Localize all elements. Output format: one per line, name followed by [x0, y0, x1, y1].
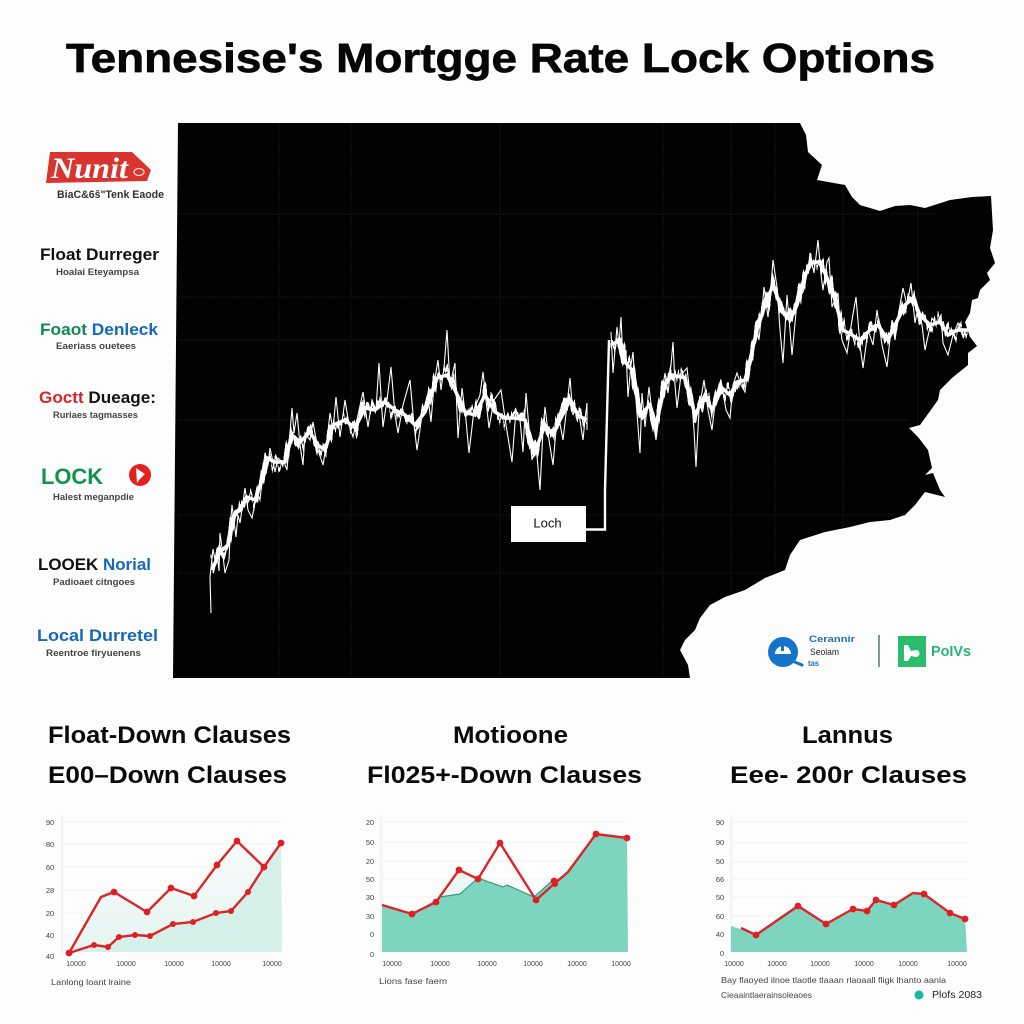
area chart 2: Lions fase faem: [379, 976, 447, 986]
heading: chart 2: Motioone: [453, 722, 568, 749]
area chart 3: 50: [716, 857, 724, 866]
line chart 1: 80: [46, 840, 54, 849]
panel: chart 1: [46, 722, 291, 987]
legend: Local Durretel: Reentroe firyuenens: [46, 648, 141, 659]
line chart 1: 10000: [211, 961, 231, 968]
legend: Foaot Denleck: Eaeriass ouetees: [56, 341, 136, 352]
line chart 1: [46, 815, 284, 987]
area chart 2: 20: [366, 818, 374, 827]
legend: Goctt Dueage: [39, 388, 156, 421]
legend: Float Durreger: [40, 245, 159, 278]
legend: Foaot Denleck: [40, 320, 159, 352]
legend: Goctt Dueage: Ruriaes tagmasses: [53, 410, 138, 421]
legend: LOCK: [41, 464, 151, 503]
area chart 3: 60: [716, 912, 724, 921]
area chart 2: 50: [366, 838, 374, 847]
map silhouette: [173, 123, 995, 678]
legend: Goctt Dueage: Goctt Dueage:: [39, 388, 156, 407]
line chart 1: 90: [46, 818, 54, 827]
area chart 3: 10000: [854, 961, 874, 968]
legend: LOCK: LOCK: [41, 464, 103, 489]
line chart 1: 60: [46, 863, 54, 872]
heading: chart 1: E00–Down Clauses: [48, 762, 287, 789]
icon: blue magnifier logo: [768, 637, 802, 667]
area chart 2: 10000: [477, 961, 497, 968]
legend: LOOEK Norial: Padioaet citngoes: [53, 577, 135, 588]
connector from Loch callout to rate line: [586, 340, 609, 530]
heading: chart 1: Float-Down Clauses: [48, 722, 291, 749]
area chart 3: 0: [720, 949, 724, 958]
area chart 2: 0: [370, 930, 374, 939]
legend: Nunit badge: Nunit: [50, 152, 130, 185]
line chart 1: 10000: [116, 961, 136, 968]
area chart 3: [716, 815, 982, 1001]
area chart 3: 50: [716, 893, 724, 902]
legend: LOOEK Norial: [38, 555, 151, 588]
area chart 2: 10000: [523, 961, 543, 968]
legend: Plofs 2083: Plofs 2083: [932, 990, 982, 1001]
area chart 3: 10000: [898, 961, 918, 968]
legend: LOCK: Halest meganpdie: [53, 492, 134, 503]
area chart 2: 30: [366, 912, 374, 921]
legend: Plofs 2083: [914, 990, 982, 1001]
line chart 1: 28: [46, 886, 54, 895]
chart 3 caption: [721, 975, 946, 1000]
legend: Float Durreger: Hoalai Eteyampsa: [56, 267, 140, 278]
area chart 2: 20: [366, 857, 374, 866]
line chart 1: 10000: [66, 961, 86, 968]
heading: chart 3: [730, 722, 967, 789]
area chart 2: 10000: [430, 961, 450, 968]
legend: Nunit badge: BiaC&6ŝ"Tenk Eaode: [57, 189, 164, 201]
area chart 3: 10000: [767, 961, 787, 968]
callout: Loch: [511, 506, 586, 542]
heading: chart 3: Eee- 200r Clauses: [730, 762, 967, 789]
area chart 2: 30: [366, 893, 374, 902]
area chart 2: 50: [366, 875, 374, 884]
logo text: Seolam: [810, 647, 839, 657]
area chart 2: [366, 815, 631, 986]
icon: green square logo: [898, 636, 926, 667]
logos: [768, 634, 971, 668]
legend: Local Durretel: [37, 626, 158, 659]
line chart 1: 10000: [262, 961, 282, 968]
heading: chart 2: [367, 722, 642, 789]
area chart 3: 10000: [947, 961, 967, 968]
area chart 3: 66: [716, 875, 724, 884]
area chart 3: 40: [716, 930, 724, 939]
legend: LOOEK Norial: LOOEK Norial: [38, 555, 151, 574]
chart grid lines: [178, 123, 965, 678]
logo text: [808, 634, 856, 668]
panel: black map with rate chart: [173, 123, 995, 678]
title: Tennesise's Mortgge Rate Lock Options: [66, 35, 935, 81]
legend: Local Durretel: Local Durretel: [37, 626, 158, 645]
logo text: tas: [808, 659, 820, 668]
area chart 3: 10000: [810, 961, 830, 968]
line chart 1: Lanlong loant lraine: [51, 977, 131, 987]
logo text: PoIVs: PoIVs: [931, 643, 971, 660]
logo text: Cerannir: [809, 634, 856, 644]
panel: left legend: [37, 152, 164, 659]
rate line: first segment: [210, 330, 587, 613]
area chart 3: 10000: [724, 961, 744, 968]
heading: chart 3: Lannus: [802, 722, 893, 749]
panel: chart 3: [716, 722, 982, 1001]
legend: Float Durreger: Float Durreger: [40, 245, 159, 264]
heading: chart 2: Fl025+-Down Clauses: [367, 762, 642, 789]
callout: Loch: Loch: [533, 516, 562, 530]
chart 3 caption: Cieaaintlaerainsoleaoes: [721, 990, 812, 1000]
rate line: second segment: [611, 240, 970, 467]
legend: Nunit badge: [46, 152, 164, 201]
area chart 2: 10000: [611, 961, 631, 968]
line chart 1: 10000: [164, 961, 184, 968]
line chart 1: 20: [46, 909, 54, 918]
area chart 3: 90: [716, 838, 724, 847]
line chart 1: 40: [46, 931, 54, 940]
area chart 2: 10000: [382, 961, 402, 968]
heading: chart 1: [48, 722, 291, 789]
area chart 2: 0: [370, 950, 374, 959]
line chart 1: 40: [46, 952, 54, 961]
area chart 3: 90: [716, 818, 724, 827]
panel: chart 2: [366, 722, 642, 986]
chart 3 caption: Bay flaoyed ilnoe tlaotle tlaaan rlaoaall fligk lhanto aanla: [721, 975, 946, 985]
area chart 2: 10000: [567, 961, 587, 968]
legend: Foaot Denleck: Foaot Denleck: [40, 320, 159, 339]
